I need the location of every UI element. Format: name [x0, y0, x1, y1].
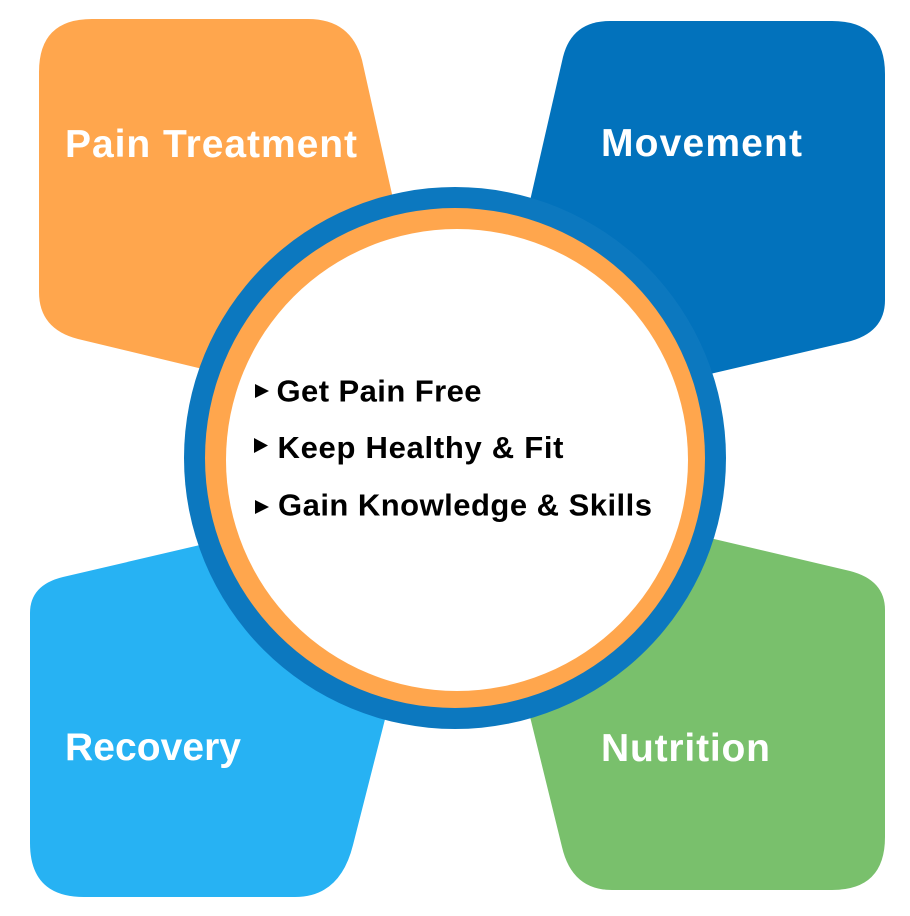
list item: Keep Healthy & Fit: Keep Healthy & Fit: [278, 430, 564, 465]
heading: Pain Treatment: Pain Treatment: [65, 123, 357, 166]
central circle: [184, 187, 726, 729]
heading: Recovery: Recovery: [65, 726, 241, 769]
panel: Movement: [521, 21, 885, 381]
panel: Nutrition: [521, 531, 885, 890]
list item: Gain Knowledge & Skills: Gain Knowledge & Skills: [278, 488, 652, 522]
heading: Movement: Movement: [601, 122, 802, 165]
panel: Pain Treatment: [39, 19, 400, 378]
panel: Recovery: [30, 538, 395, 897]
heading: Nutrition: Nutrition: [601, 727, 770, 770]
list item: Get Pain Free: Get Pain Free: [276, 374, 482, 408]
